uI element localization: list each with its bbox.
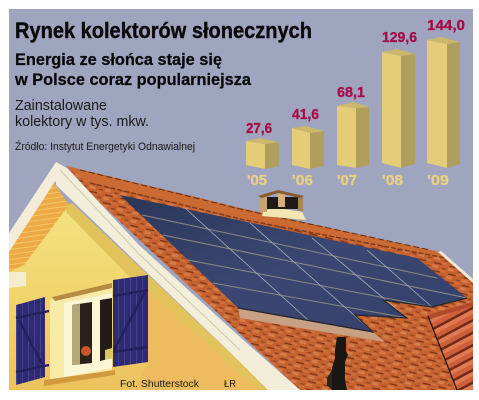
chart description: Zainstalowane	[15, 97, 107, 114]
photo credit: Fot. Shutterstock	[120, 378, 200, 390]
left barge board	[9, 162, 62, 252]
bar 2006: 41,6	[292, 106, 319, 123]
white eave strip	[56, 162, 300, 390]
author initials: ŁR	[224, 378, 236, 390]
bar 2009: 144,0	[427, 17, 465, 34]
solar panels	[120, 195, 467, 332]
subtitle: w Polsce coraz popularniejsza	[14, 70, 252, 89]
gable soffit	[9, 183, 69, 272]
source: Źródło: Instytut Energetyki Odnawialnej	[15, 140, 195, 153]
left shutter	[16, 297, 49, 385]
bar 2008	[382, 29, 417, 189]
light tile band under panels	[238, 308, 385, 342]
bar 2005: 27,6	[246, 120, 272, 137]
bar 2007	[337, 84, 369, 189]
chimney	[258, 190, 306, 220]
dormer roof	[428, 302, 473, 390]
chart description	[15, 97, 149, 130]
bar 2009	[427, 17, 465, 189]
roof ridge tiles	[66, 166, 446, 258]
photo: house with solar panels	[9, 162, 473, 390]
roof	[66, 166, 473, 390]
bar 2006: '06	[292, 172, 313, 189]
right shutter	[113, 275, 148, 367]
bar 2008: '08	[382, 172, 403, 189]
wall	[9, 205, 270, 390]
bar 2005: '05	[247, 172, 267, 189]
bar 2006	[292, 106, 324, 189]
title: Rynek kolektorów słonecznych	[15, 18, 312, 43]
window	[44, 283, 115, 386]
bar 2007: 68,1	[337, 84, 365, 101]
wall shadow right of window	[135, 290, 258, 390]
bar 2005	[246, 120, 279, 189]
bar 2007: '07	[337, 172, 357, 189]
gable white block	[9, 272, 26, 288]
wall shadow under eave	[66, 203, 268, 390]
right roof eave	[438, 251, 473, 283]
bar chart	[246, 17, 465, 189]
vent pipe	[327, 337, 348, 390]
bar 2009: '09	[427, 172, 449, 189]
bar 2008: 129,6	[382, 29, 417, 46]
subtitle	[14, 50, 252, 89]
subtitle: Energia ze słońca staje się	[15, 50, 222, 69]
chart description: kolektory w tys. mkw.	[15, 113, 149, 130]
